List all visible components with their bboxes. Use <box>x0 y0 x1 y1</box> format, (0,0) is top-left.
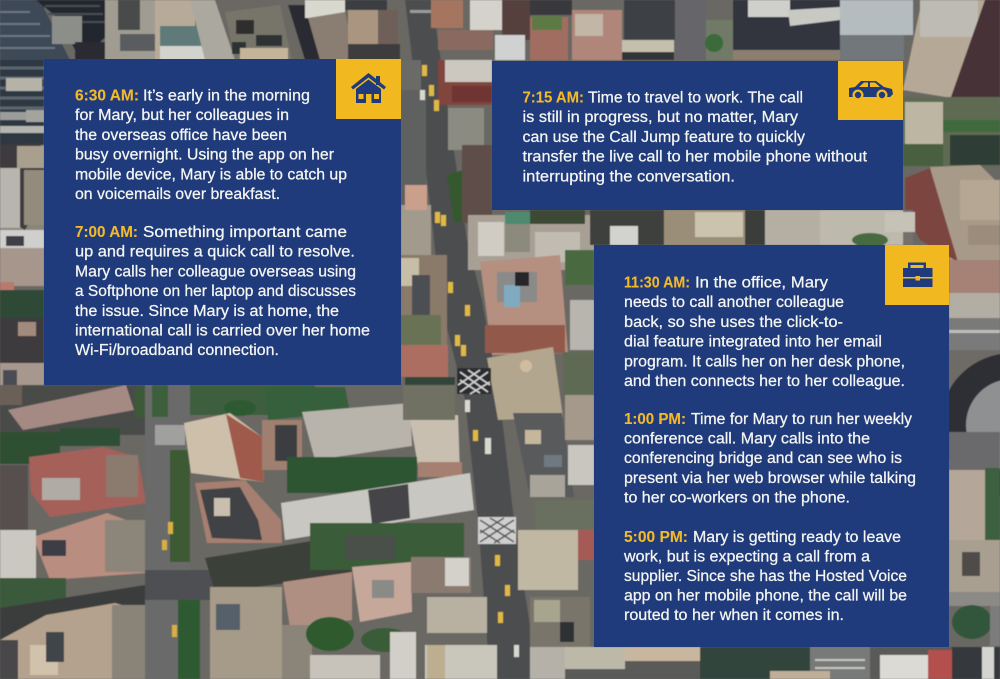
crossing 2 <box>478 517 516 544</box>
side avenue <box>145 385 190 679</box>
panel: morning <box>44 59 401 385</box>
icon: house <box>336 59 401 119</box>
text: 1:00 PM: present via her web browser while talking <box>624 470 916 487</box>
text: 1:00 PM <box>624 411 916 506</box>
text: 11:30 AM: needs to call another colleague <box>624 294 844 311</box>
text: 5:00 PM: routed to her when it comes in. <box>624 607 844 624</box>
text: 1:00 PM: Time for Mary to run her weekly <box>691 411 912 428</box>
text: 11:30 AM: 11:30 AM: <box>624 274 690 292</box>
text: 6:30 AM: for Mary, but her colleagues in <box>75 107 289 124</box>
text: 7:00 AM: Something important came <box>143 224 347 241</box>
text: 6:30 AM: mobile device, Mary is able to catch up <box>75 166 347 183</box>
panel: commute <box>492 61 903 210</box>
top left towers <box>0 0 44 145</box>
text: 7:15 AM: 7:15 AM: <box>522 90 584 106</box>
text: 6:30 AM: on voicemails over breakfast. <box>75 186 280 203</box>
text: 7:15 AM: interrupting the conversation. <box>522 168 735 185</box>
text: 11:30 AM: In the office, Mary <box>695 274 828 292</box>
text: 1:00 PM: 1:00 PM: <box>624 411 686 428</box>
text: 7:00 AM: the issue. Since Mary is at home, the <box>75 303 339 320</box>
text: 7:15 AM: is still in progress, but no matter, Mary <box>522 109 798 126</box>
text: 5:00 PM: Mary is getting ready to leave <box>693 529 901 546</box>
between panels <box>438 60 492 105</box>
text: 1:00 PM: conference call. Mary calls into the <box>624 431 870 448</box>
middle blocks <box>401 255 447 355</box>
text: 6:30 AM <box>75 88 347 203</box>
text: 1:00 PM: to her co-workers on the phone. <box>624 489 850 506</box>
text: 7:00 AM: Mary calls her colleague overseas using <box>75 263 356 280</box>
traffic circle <box>949 350 1000 432</box>
text: 7:00 AM: 7:00 AM: <box>75 224 138 241</box>
text: 7:00 AM: Wi-Fi/broadband connection. <box>75 342 279 359</box>
top middle buildings <box>431 0 463 28</box>
taxis <box>422 65 427 76</box>
center lower blocks <box>190 385 315 415</box>
text: 6:30 AM: 6:30 AM: <box>75 88 139 104</box>
text: 1:00 PM: conferencing bridge and can see who is <box>624 450 902 467</box>
text: 5:00 PM <box>623 529 907 624</box>
text: 11:30 AM: dial feature integrated into her email <box>624 334 882 351</box>
text: 5:00 PM: app on her mobile phone, the call will be <box>624 588 907 604</box>
text: 11:30 AM: and then connects her to her colleague. <box>624 373 905 390</box>
text: 11:30 AM <box>624 274 905 390</box>
text: 7:00 AM: international call is carried over her home <box>75 322 370 340</box>
icon: car <box>838 61 903 120</box>
text: 7:15 AM: transfer the live call to her mobile phone without <box>522 149 868 166</box>
text: 7:00 AM: up and requires a quick call to resolve. <box>75 244 355 261</box>
crossing 1 <box>457 368 491 394</box>
text: 7:15 AM: Time to travel to work. The call <box>588 90 803 106</box>
text: 5:00 PM: work, but is expecting a call from a <box>623 548 870 566</box>
text: 11:30 AM: back, so she uses the click-to- <box>624 314 843 331</box>
icon: briefcase <box>885 245 949 305</box>
text: 7:15 AM <box>522 90 868 185</box>
text: 5:00 PM: supplier. Since she has the Hosted Voice <box>624 568 907 585</box>
bottom right strip <box>560 647 1000 679</box>
text: 7:00 AM: a Softphone on her laptop and discusses <box>75 283 356 300</box>
main avenue <box>405 0 538 679</box>
panel: workday <box>594 245 949 647</box>
text: 6:30 AM: It’s early in the morning <box>143 88 310 104</box>
text: 6:30 AM: busy overnight. Using the app on her <box>75 147 334 164</box>
text: 5:00 PM: 5:00 PM: <box>624 529 688 546</box>
text: 7:15 AM: can use the Call Jump feature to quickly <box>522 129 805 146</box>
right of panel 2 <box>903 97 1000 167</box>
text: 7:00 AM <box>75 224 370 359</box>
lower left block <box>0 385 150 435</box>
text: 6:30 AM: the overseas office have been <box>75 127 287 144</box>
text: 11:30 AM: program. It calls her on her desk phone, <box>624 353 905 370</box>
